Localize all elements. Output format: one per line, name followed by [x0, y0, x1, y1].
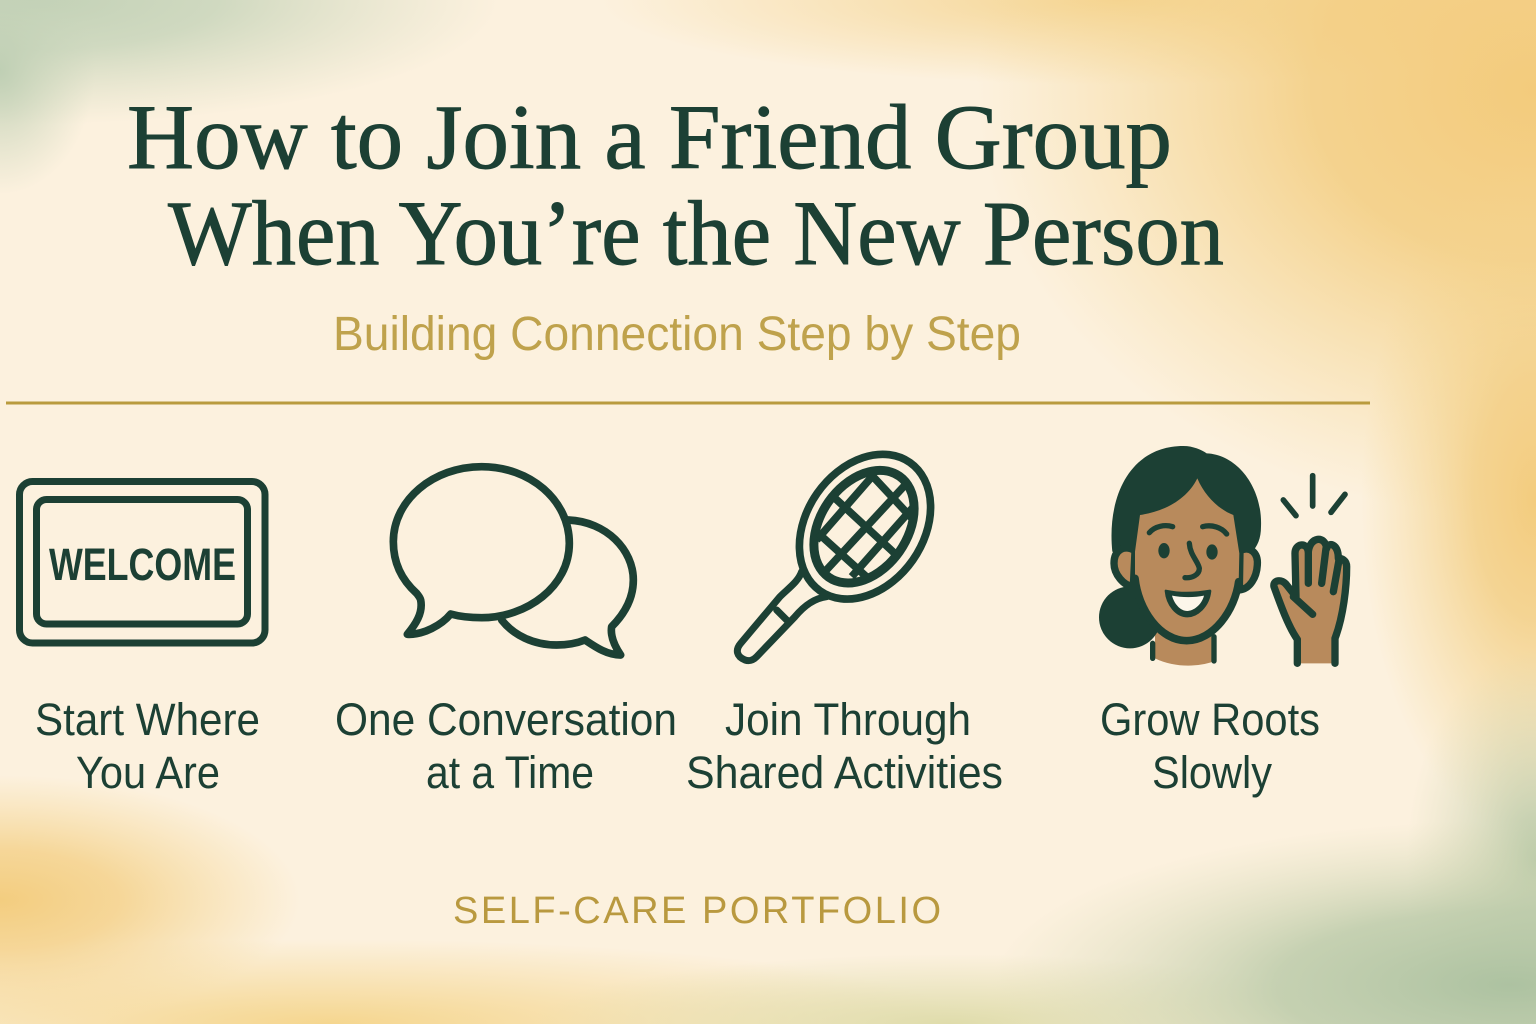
caption: grow roots slowly: Grow Roots [1100, 694, 1320, 745]
mouth [1166, 591, 1210, 616]
title: When You’re the New Person [168, 182, 1224, 284]
title: How to Join a Friend Group [127, 86, 1172, 188]
hair bun [1099, 586, 1161, 648]
caption: one conversation at a time: at a Time [426, 747, 594, 798]
wave marks [1283, 476, 1345, 516]
footer: SELF-CARE PORTFOLIO [453, 890, 941, 932]
caption: start where you are: You Are [76, 747, 220, 798]
icon: speech bubbles [393, 467, 633, 655]
icon: tennis racket [734, 450, 934, 664]
caption: start where you are: Start Where [35, 694, 260, 745]
caption: join through shared activities [686, 694, 1003, 798]
ears [1114, 548, 1135, 587]
neck [1155, 630, 1213, 666]
hair [1112, 446, 1261, 563]
icon: smiling person waving [1099, 446, 1347, 666]
face [1135, 478, 1239, 641]
caption: grow roots slowly: Slowly [1152, 747, 1272, 798]
caption: one conversation at a time [335, 694, 677, 798]
waving hand [1274, 539, 1347, 663]
icon: welcome mat [20, 482, 265, 643]
caption: one conversation at a time: One Conversation [335, 694, 677, 745]
subtitle: Building Connection Step by Step [333, 308, 1021, 361]
caption: join through shared activities: Shared Activities [686, 747, 1003, 798]
caption: grow roots slowly [1100, 694, 1320, 798]
eyes and brows [1149, 526, 1227, 578]
icon: welcome mat: WELCOME [49, 539, 236, 590]
caption: start where you are [35, 694, 260, 798]
title [127, 86, 1224, 284]
caption: join through shared activities: Join Through [725, 694, 971, 745]
face outline [1135, 578, 1239, 641]
